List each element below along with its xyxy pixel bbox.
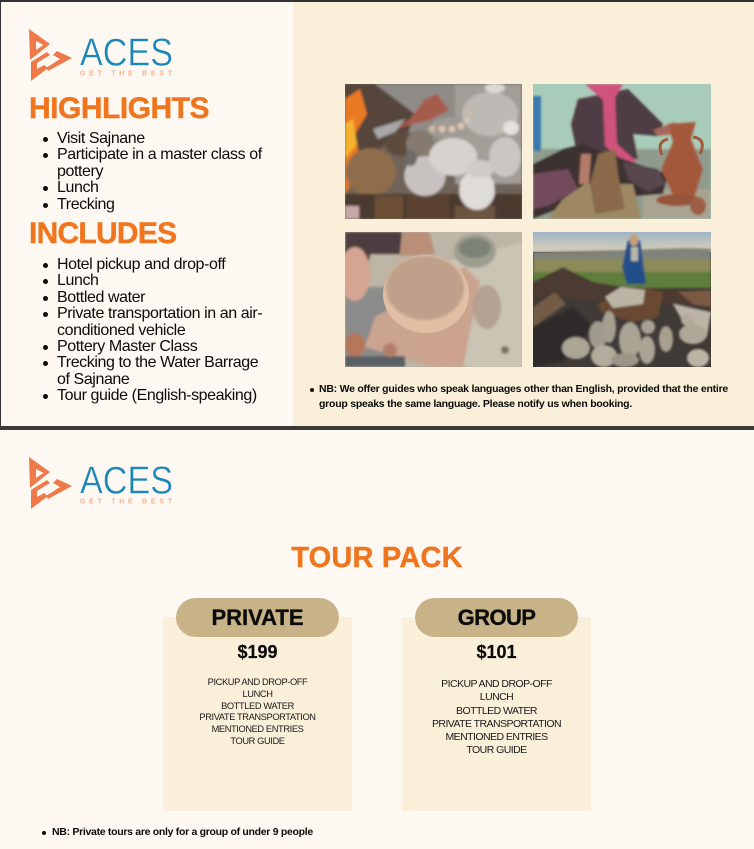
panel: private card — [163, 617, 352, 811]
list: includes: Bottled water — [57, 289, 145, 306]
list: group features: MENTIONED ENTRIES — [445, 731, 548, 743]
icon: triangle mark — [29, 457, 72, 509]
panel: photos background — [293, 2, 754, 426]
note: private tours: NB: Private tours are only for a group of under 9 people — [52, 826, 313, 838]
frame: left edge — [0, 0, 1, 428]
tagline: GET THE BEST — [80, 70, 173, 78]
frame: top bar — [0, 0, 754, 2]
list: highlights: Lunch — [57, 179, 99, 196]
bowl — [383, 255, 469, 333]
photo: woman with clay pots in a field — [533, 232, 711, 367]
list: highlights: Visit Sajnane — [57, 130, 145, 147]
list: includes: Pottery Master Class — [57, 338, 197, 355]
list: private features — [199, 677, 316, 746]
pill: group: GROUP — [458, 605, 535, 630]
photo: potter with clay jar — [533, 84, 711, 219]
list: group features: PRIVATE TRANSPORTATION — [432, 718, 561, 730]
list: private features: LUNCH — [242, 689, 273, 699]
heading: includes: INCLUDES — [29, 217, 176, 250]
heading: highlights: HIGHLIGHTS — [29, 92, 209, 125]
price: private: $199 — [237, 642, 278, 662]
price: group: $101 — [476, 642, 517, 662]
list: private features: MENTIONED ENTRIES — [212, 724, 303, 734]
logo: ACES bottom — [29, 457, 173, 509]
list: private features: BOTTLED WATER — [221, 701, 294, 711]
tagline: GET THE BEST — [80, 498, 173, 506]
note: guides: group speaks the same language. Please notify us when booking. — [319, 398, 632, 410]
list: private features: TOUR GUIDE — [230, 736, 285, 746]
list: includes: Hotel pickup and drop-off — [57, 256, 225, 273]
icon: triangle mark — [29, 29, 72, 81]
photo: pottery firing — [345, 84, 522, 219]
list: highlights: Trecking — [57, 196, 114, 213]
list: private features: PRIVATE TRANSPORTATION — [199, 712, 316, 722]
frame: slide divider — [0, 426, 754, 430]
photo: hands shaping a bowl — [345, 232, 522, 367]
list: group features: TOUR GUIDE — [466, 744, 527, 756]
list: includes: Tour guide (English-speaking) — [57, 387, 257, 404]
list: includes: Trecking to the Water Barrage of Sajnane — [57, 354, 258, 388]
list: includes — [43, 256, 262, 404]
note: guides: NB: We offer guides who speak languages other than English, provided that the entire — [319, 383, 728, 395]
pill: private: PRIVATE — [211, 605, 304, 630]
logo: ACES top — [29, 29, 173, 81]
title: tour pack: TOUR PACK — [291, 542, 463, 574]
list: group features: LUNCH — [480, 691, 513, 703]
list: group features: PICKUP AND DROP-OFF — [441, 678, 552, 690]
list: group features: BOTTLED WATER — [456, 705, 537, 717]
pill: group — [415, 598, 578, 637]
list: highlights: Participate in a master class of pottery — [57, 146, 262, 180]
list: includes: Private transportation in an air-conditioned vehicle — [57, 305, 262, 339]
panel: group card — [402, 617, 591, 811]
list: highlights — [43, 130, 262, 213]
pill: private — [176, 598, 339, 637]
list: private features: PICKUP AND DROP-OFF — [208, 677, 307, 687]
list: includes: Lunch — [57, 272, 99, 289]
note: guides — [310, 383, 728, 410]
list: group features — [432, 678, 561, 756]
